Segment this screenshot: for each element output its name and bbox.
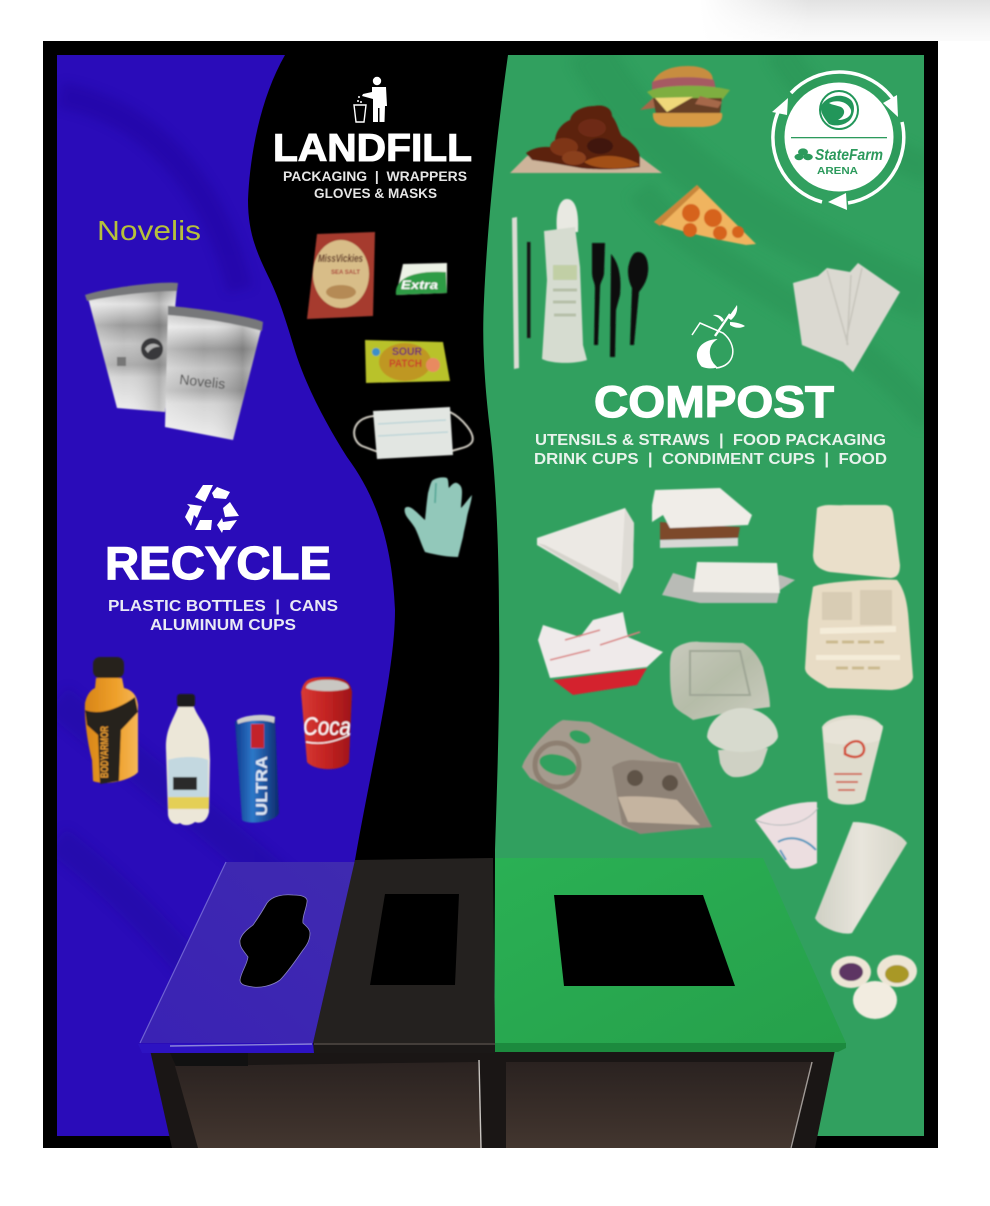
compostable packaging xyxy=(522,488,917,1019)
icon: napkins xyxy=(793,263,900,372)
icon: Coca-Cola can xyxy=(301,677,352,769)
text: State Farm: StateFarm xyxy=(815,147,883,164)
icon: chip bag: SEA SALT xyxy=(331,270,360,276)
icon: clear clamshell xyxy=(670,642,770,720)
subtitle: compost items: DRINK CUPS | CONDIMENT CUPS | FOOD xyxy=(534,451,887,468)
icon: latex glove xyxy=(405,477,472,557)
icon: pizza slice xyxy=(654,185,756,245)
subtitle: recycle items: PLASTIC BOTTLES | CANS xyxy=(108,598,338,615)
icon: tall clear cup xyxy=(815,822,907,934)
logo text: Novelis: Novelis xyxy=(97,215,201,246)
landfill lid xyxy=(313,858,495,1053)
icon: black stirrer xyxy=(527,242,530,338)
landfill slot xyxy=(370,894,459,985)
compost slot xyxy=(554,895,735,986)
heading block: compost xyxy=(534,305,887,468)
subtitle: landfill items: PACKAGING | WRAPPERS xyxy=(283,169,467,184)
heading block: landfill xyxy=(273,77,472,201)
icon: recycle arrows xyxy=(185,485,239,533)
icon: BodyArmor bottle xyxy=(85,657,138,784)
icon: Ultra beer can: ULTRA xyxy=(254,756,271,816)
icon: compostable cup with red logo xyxy=(822,715,883,805)
heading block: recycle xyxy=(105,485,338,634)
icon: wrapped cutlery kit xyxy=(542,199,587,363)
panel: compost green background xyxy=(483,50,930,1136)
title: LANDFILL: LANDFILL xyxy=(273,127,472,170)
icon: Sour Patch candy box: PATCH xyxy=(389,358,422,370)
landfill items xyxy=(307,232,473,557)
icon: Ultra beer can xyxy=(235,715,279,823)
icon: chip bag: MissVickies xyxy=(318,253,363,265)
icon: Extra gum xyxy=(396,263,447,295)
title: RECYCLE: RECYCLE xyxy=(105,537,331,589)
icon: pizza slice box xyxy=(537,508,634,594)
food items xyxy=(510,66,900,372)
icon: Hawks head emblem xyxy=(820,91,858,129)
recycle lid xyxy=(138,862,355,1053)
icon: black fork xyxy=(592,243,605,345)
icon: State Farm three ovals xyxy=(794,148,813,160)
subtitle: compost items: UTENSILS & STRAWS | FOOD PACKAGING xyxy=(535,432,886,449)
recycling station bins xyxy=(138,858,846,1148)
icon: food tray with paper liner xyxy=(538,612,663,695)
icon: burger xyxy=(640,66,730,127)
title: COMPOST: COMPOST xyxy=(594,378,834,427)
icon: clear lidded cup xyxy=(707,708,778,777)
compost lid xyxy=(495,858,846,1052)
icon: small clear cup with blue logo xyxy=(755,802,818,869)
icon: chip bag xyxy=(307,232,375,319)
icon: black knife xyxy=(610,254,621,357)
icon: aluminum cups xyxy=(85,283,263,440)
icon: chicken wings on tray xyxy=(510,105,662,173)
icon: face mask xyxy=(354,407,473,459)
text: Arena: ARENA xyxy=(817,165,858,177)
corner shading xyxy=(700,0,990,41)
icon: Coca-Cola can: Coca xyxy=(303,713,351,741)
panel: recycle blue background xyxy=(57,55,395,1136)
icon: compost sprout xyxy=(692,305,745,368)
icon: lemonade bottle xyxy=(166,694,210,825)
icon: condiment cups xyxy=(831,955,917,1019)
logo: State Farm Arena xyxy=(772,72,904,210)
recyclable containers xyxy=(85,657,352,825)
icon: Sour Patch candy box: SOUR xyxy=(392,346,422,358)
icon: black spoon xyxy=(628,252,648,345)
icon: sugarcane clamshell xyxy=(805,505,913,690)
icon: open pizza box xyxy=(652,488,752,548)
icon: person using trash bin xyxy=(354,77,387,122)
icon: paper straw xyxy=(512,217,519,369)
subtitle: recycle items: ALUMINUM CUPS xyxy=(150,617,296,634)
subtitle: landfill items xyxy=(283,169,467,201)
subtitle: landfill items: GLOVES & MASKS xyxy=(314,186,437,201)
icon: aluminum cups: Novelis xyxy=(179,371,226,392)
icon: BodyArmor bottle: BODYARMOR xyxy=(99,726,111,778)
subtitle: compost items xyxy=(534,432,887,468)
cabinet body xyxy=(150,1050,835,1148)
subtitle: recycle items xyxy=(108,598,338,634)
icon: hot dog box in wrapper xyxy=(662,562,795,603)
icon: Sour Patch candy box xyxy=(365,340,450,383)
recycle slot xyxy=(240,895,310,987)
icon: Extra gum: Extra xyxy=(401,278,438,292)
icon: fiber drink carrier xyxy=(522,720,712,834)
